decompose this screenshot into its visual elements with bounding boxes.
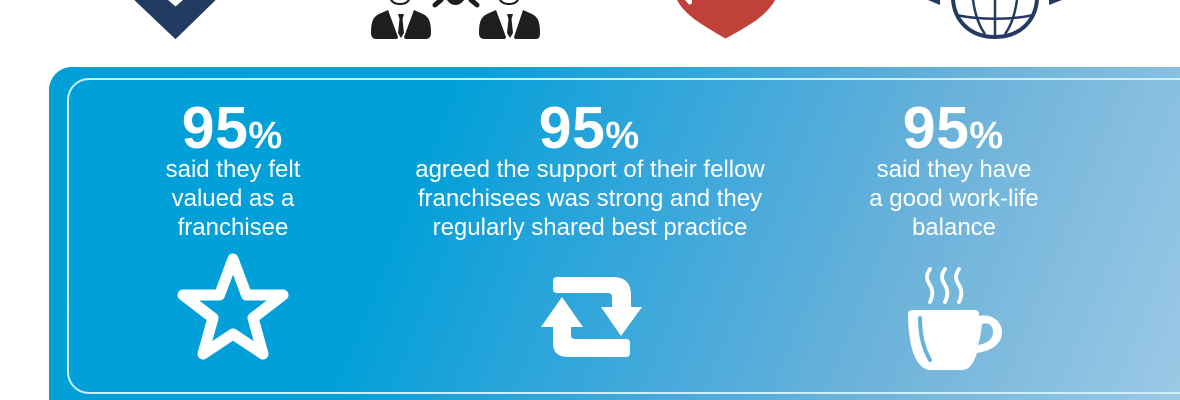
figure: 95% support: 95% [539,95,639,161]
icon: navy globe with arrows [928,0,1062,37]
stat: fellow franchisee support [415,95,765,241]
text: valued as a franchisee: franchisee [178,214,288,241]
icon: red heart [677,0,775,38]
text: valued as a franchisee: said they felt [166,156,300,183]
icon: star [183,259,283,354]
figure: 95% valued: 95% [182,95,282,161]
text: support and best practice [415,156,765,241]
text: support and best practice: franchisees was strong and they [418,185,762,212]
panel: blue statistics panel [49,67,1180,400]
stat: work-life balance [869,95,1039,241]
text: good work-life balance [869,156,1039,241]
text: support and best practice: regularly shared best practice [433,214,747,241]
icon: coffee cup with steam [908,269,1002,370]
top icons row [134,0,1062,39]
text: good work-life balance: said they have [877,156,1031,183]
icon: business people [371,0,540,39]
text: good work-life balance: a good work-life [869,185,1039,212]
text: support and best practice: agreed the support of their fellow [415,156,765,183]
icon: repeat arrows [541,277,642,357]
figure: 95% balance: 95% [903,95,1003,161]
stat: felt valued [166,95,300,241]
text: good work-life balance: balance [912,214,996,241]
text: valued as a franchisee [166,156,300,241]
text: valued as a franchisee: valued as a [172,185,294,212]
icon: navy shield [135,0,215,38]
panel inner outline [67,78,1180,394]
